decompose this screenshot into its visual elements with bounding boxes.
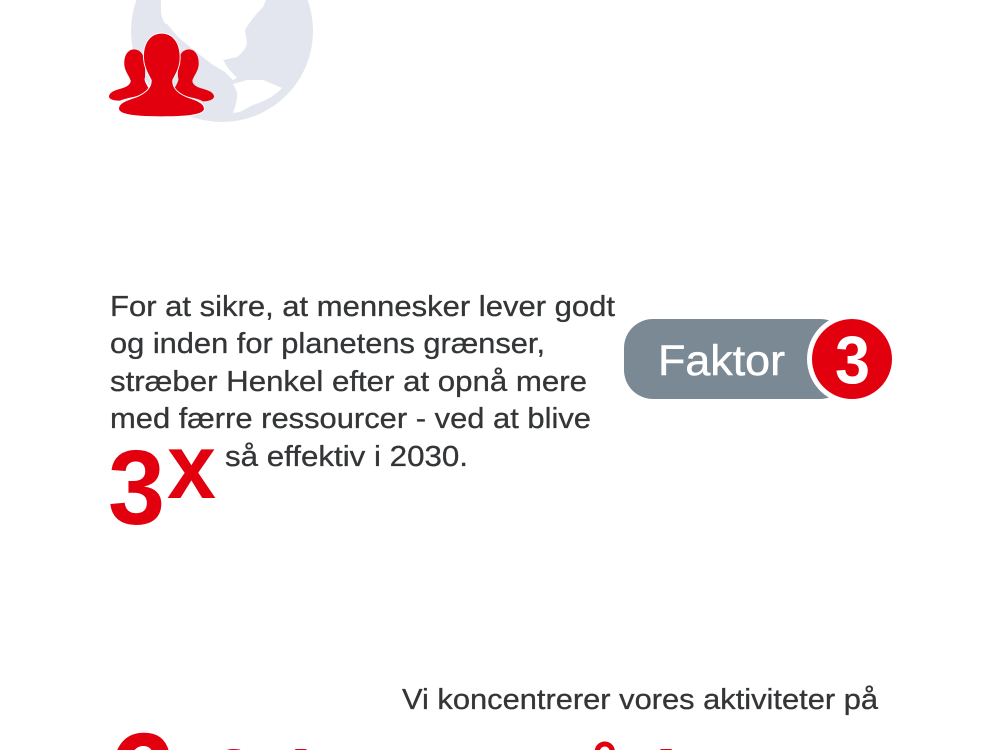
icon: right person [173,49,214,101]
icon: centre person [119,34,204,116]
badge: Faktor 3 [624,310,905,408]
text block: intro paragraph: For at sikre, at mennesker lever godt [110,291,615,323]
icon: group of people [109,34,214,116]
text block: intro paragraph: og inden for planetens grænser, [110,328,545,360]
badge: Faktor 3: Faktor [658,337,785,385]
heading: 3x: x [167,416,216,518]
heading: 3x [108,416,216,547]
text block: focus intro: Vi koncentrerer vores aktiviteter på [402,684,879,716]
icon: left person [109,49,150,101]
badge: Faktor 3: 3 [835,322,870,398]
text block: intro paragraph: med færre ressourcer - ved at blive [110,403,591,435]
heading: 3x: 3 [108,429,165,547]
icon: globe [131,0,313,122]
heading: 6 fokusområder [108,708,754,750]
text block: intro paragraph: så effektiv i 2030. [225,441,468,473]
text block: intro paragraph: stræber Henkel efter at opnå mere [110,366,587,398]
text block: intro paragraph [110,291,615,473]
